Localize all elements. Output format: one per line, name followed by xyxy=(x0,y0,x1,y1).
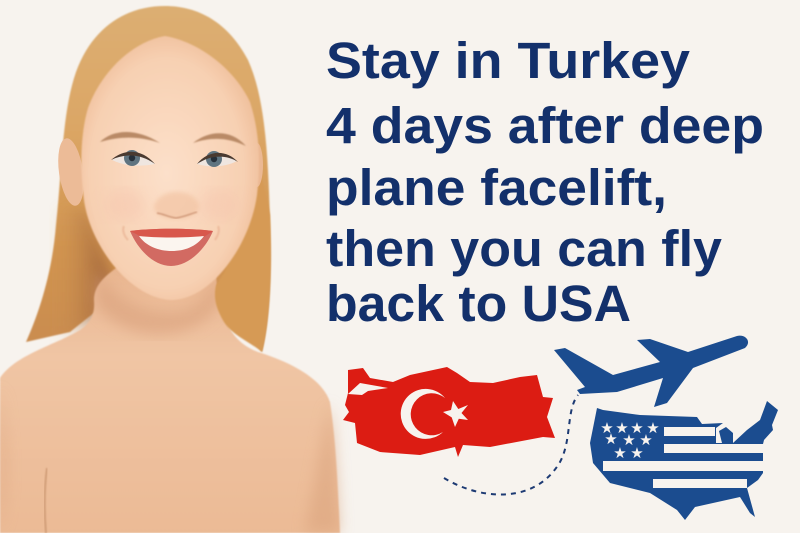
left eyebrow xyxy=(100,132,160,143)
dark hair behind neck xyxy=(55,208,115,340)
flag stars: ★ xyxy=(622,431,636,449)
right ear xyxy=(251,143,263,187)
title xyxy=(326,32,764,332)
face xyxy=(81,36,259,300)
icon: airplane xyxy=(554,336,748,407)
title: 4 days after deep xyxy=(326,97,764,154)
title: plane facelift, xyxy=(326,159,667,216)
neck and shoulders xyxy=(0,262,340,533)
nose xyxy=(154,192,199,219)
map: USA flag xyxy=(590,401,778,520)
map: Turkey flag xyxy=(343,367,555,457)
flag stars: ★ xyxy=(630,444,644,462)
Thrace gap xyxy=(348,383,388,395)
hair xyxy=(26,6,271,352)
shoulder shading xyxy=(0,385,340,533)
arm crease xyxy=(45,468,47,533)
ear xyxy=(54,137,88,207)
right eyebrow xyxy=(193,133,246,146)
neck shadow xyxy=(96,270,220,334)
flag stripes xyxy=(664,427,715,436)
flag stars: ★ xyxy=(630,419,644,437)
star xyxy=(443,401,468,427)
nostrils xyxy=(157,212,197,218)
cheeks xyxy=(105,189,240,221)
left eye xyxy=(111,150,155,166)
flag stars: ★ xyxy=(604,430,618,448)
flag stars: ★ xyxy=(615,419,629,437)
flag stars: ★ xyxy=(600,419,614,437)
dotted flight path xyxy=(444,395,578,495)
smile lines xyxy=(123,226,219,240)
title: then you can fly xyxy=(326,220,723,277)
right hair lock xyxy=(215,150,271,352)
flag stars: ★ xyxy=(639,431,653,449)
crescent xyxy=(401,389,445,439)
right eye xyxy=(197,151,238,167)
flag stars xyxy=(600,419,660,462)
title: back to USA xyxy=(326,275,631,332)
portrait of smiling woman xyxy=(0,6,340,533)
title: Stay in Turkey xyxy=(326,32,691,89)
flag stars: ★ xyxy=(646,419,660,437)
flag stars: ★ xyxy=(613,444,627,462)
mouth xyxy=(130,229,213,266)
